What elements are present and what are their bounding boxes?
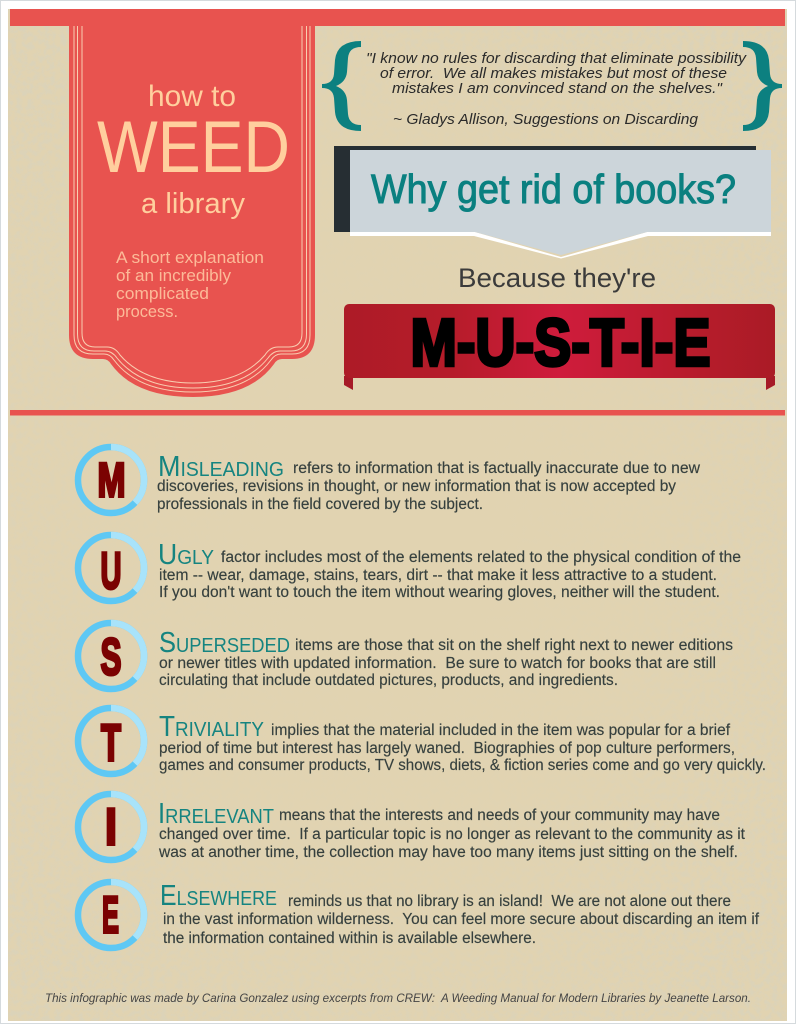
icon: I ring: I [105, 798, 117, 856]
text: Elsewhere description: ELSEWHERE [160, 880, 277, 912]
text: Elsewhere description [160, 880, 760, 947]
text: Superseded description: or newer titles with updated information. Be sure to watch for books that are still [159, 655, 716, 672]
text: Irrelevant description: IRRELEVANT [158, 798, 274, 830]
text: Irrelevant description: changed over time. If a particular topic is no longer as relevant to the community as it [159, 826, 746, 843]
quote text: ~ Gladys Allison, Suggestions on Discarding [393, 112, 699, 128]
heading: why get rid of books: Why get rid of books? [371, 166, 736, 212]
icon: T ring [78, 708, 144, 774]
heading: M-U-S-T-I-E: M-U-S-T-I-E [410, 306, 710, 380]
panel: title banner [69, 26, 315, 397]
text: Irrelevant description [158, 798, 746, 861]
row: Misleading [78, 447, 701, 513]
quote text [366, 51, 748, 128]
text: short explanation: A short explanation [116, 249, 264, 267]
text: Triviality description: games and consumer products, TV shows, diets, & fiction series come and go very quickly. [159, 757, 766, 774]
row: Triviality [78, 708, 766, 774]
text: Ugly description: item -- wear, damage, stains, tears, dirt -- that make it less attractive to a student. [159, 567, 717, 584]
icon: I ring [78, 794, 144, 860]
text: Ugly description: UGLY [158, 539, 214, 571]
text: Elsewhere description: in the vast information wilderness. You can feel more secure about discarding an item if [163, 911, 760, 928]
text: Triviality description [159, 711, 766, 774]
text: Superseded description: SUPERSEDED [159, 627, 290, 659]
text: Triviality description: implies that the material included in the item was popular for a brief [271, 722, 731, 739]
text: Triviality description: TRIVIALITY [159, 711, 264, 743]
row: Ugly [78, 535, 741, 601]
top red bar [10, 9, 785, 26]
icon: M ring [78, 447, 144, 513]
text: short explanation: of an incredibly [116, 267, 232, 285]
heading: how to: how to [148, 80, 236, 113]
panel: MUSTIE ribbon [344, 304, 775, 390]
text: Misleading description: refers to information that is factually inaccurate due to new [293, 460, 701, 477]
text: Misleading description [157, 451, 701, 513]
icon: U ring: U [100, 542, 122, 600]
footer credit: This infographic was made by Carina Gonzalez using excerpts from CREW: A Weeding Manual for Modern Libraries by Jeanette Larson. [45, 991, 751, 1005]
quote text: mistakes I am convinced stand on the shelves." [392, 81, 723, 97]
heading: a library: a library [141, 188, 245, 220]
text: Superseded description: items are those that sit on the shelf right next to newer editions [295, 637, 733, 654]
text: Misleading description: discoveries, revisions in thought, or new information that is now accepted by [157, 478, 676, 495]
text: because they're: Because they're [458, 263, 656, 293]
text: Irrelevant description: was at another time, the collection may have too many items just sitting on the shelf. [158, 844, 738, 861]
text: Superseded description: circulating that include outdated pictures, products, and ingredients. [159, 672, 618, 689]
icon: E ring [78, 882, 144, 948]
text: Misleading description: professionals in the field covered by the subject. [157, 496, 483, 513]
quote text: of error. We all makes mistakes but most of these [380, 66, 727, 82]
text: short explanation: process. [116, 303, 178, 321]
text: Irrelevant description: means that the interests and needs of your community may have [279, 807, 720, 824]
text: short explanation [116, 249, 264, 321]
text: Elsewhere description: reminds us that no library is an island! We are not alone out there [288, 893, 731, 910]
text: Ugly description: If you don't want to touch the item without wearing gloves, neither will the student. [159, 584, 720, 601]
row: Elsewhere [78, 880, 760, 948]
text: Ugly description [158, 539, 741, 601]
row: Irrelevant [78, 794, 746, 861]
text: Misleading description: MISLEADING [158, 451, 284, 483]
icon: M ring: M [98, 454, 126, 508]
row: Superseded [78, 623, 733, 689]
icon: left curly brace [322, 41, 361, 131]
divider red bar [10, 410, 785, 416]
text: short explanation: complicated [116, 285, 209, 303]
icon: T ring: T [101, 714, 121, 772]
text: Ugly description: factor includes most of the elements related to the physical condition of the [221, 549, 741, 566]
icon: U ring [78, 535, 144, 601]
icon: S ring [78, 623, 144, 689]
icon: S ring: S [100, 628, 122, 686]
text: Triviality description: period of time but interest has largely waned. Biographies of pop culture performers, [159, 740, 735, 757]
quote text: "I know no rules for discarding that eliminate possibility [366, 51, 748, 67]
text: Superseded description [159, 627, 733, 689]
text: Elsewhere description: the information contained within is available elsewhere. [163, 930, 536, 947]
icon: E ring: E [102, 886, 119, 944]
panel: why get rid of books callout [334, 146, 771, 258]
heading: WEED: WEED [97, 107, 290, 188]
icon: right curly brace [743, 41, 782, 131]
